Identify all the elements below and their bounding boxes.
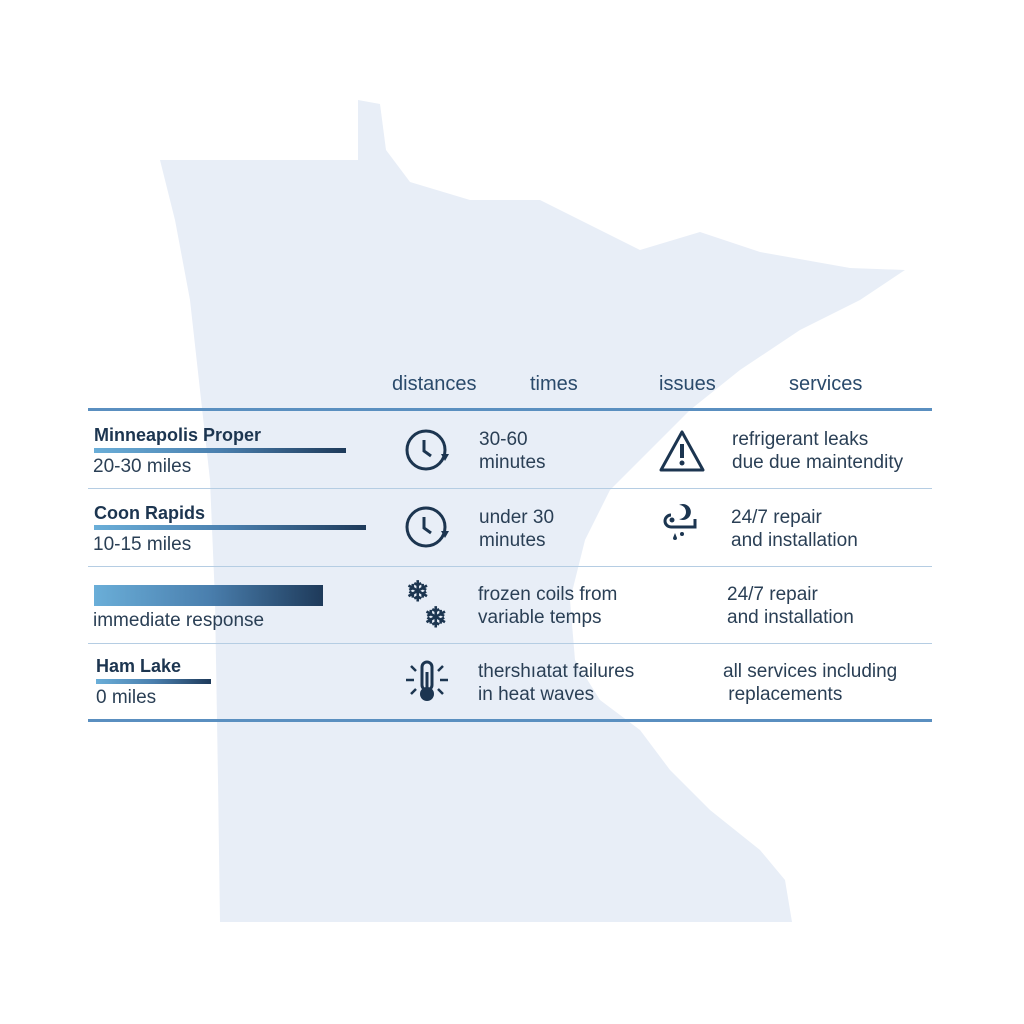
row 3: immediate response: variable temps (478, 607, 602, 628)
icon: snowflakes (406, 576, 447, 633)
row 4: Ham Lake: thershıatat failures (478, 661, 634, 682)
row 1: Minneapolis Proper: 20-30 miles (93, 456, 191, 477)
row 3: immediate response: 24/7 repair (727, 584, 818, 605)
row 1: Minneapolis Proper: refrigerant leaks (732, 429, 868, 450)
row 1: Minneapolis Proper: 30-60 (479, 429, 528, 450)
icon: clock (406, 506, 449, 548)
icon: snowflakes: ❄ (424, 602, 447, 633)
row 1: Minneapolis Proper: minutes (479, 452, 546, 473)
row 4: Ham Lake: all services including (723, 661, 897, 682)
row 2: Coon Rapids: 10-15 miles (93, 534, 191, 555)
row 3: immediate response: and installation (727, 607, 854, 628)
column headers: issues (659, 373, 716, 395)
row 2: Coon Rapids: minutes (479, 530, 546, 551)
icon: cloud rain (664, 504, 696, 540)
row 2: Coon Rapids: Coon Rapids (94, 503, 205, 523)
row 4: Ham Lake: 0 miles (96, 687, 156, 708)
icon: snowflakes: ❄ (406, 576, 429, 607)
column headers: services (789, 373, 862, 395)
icon: thermometer (406, 660, 448, 701)
icon: clock (406, 430, 449, 470)
column headers: times (530, 373, 578, 395)
row 3: immediate response: immediate response (93, 610, 264, 631)
row 1: Minneapolis Proper (93, 425, 903, 477)
column headers: distances (392, 373, 476, 395)
row 4: Ham Lake: in heat waves (478, 684, 594, 705)
row 1: Minneapolis Proper: Minneapolis Proper (94, 425, 261, 445)
row 1: Minneapolis Proper: due due maintendity (732, 452, 903, 473)
row 4: Ham Lake (96, 656, 897, 708)
row 2: Coon Rapids (93, 503, 858, 555)
row 2: Coon Rapids: and installation (731, 530, 858, 551)
row 3: immediate response (93, 576, 854, 633)
icon: warning (660, 430, 705, 472)
row 4: Ham Lake: Ham Lake (96, 656, 181, 676)
column headers (392, 373, 862, 395)
row 2: Coon Rapids: 24/7 repair (731, 507, 822, 528)
row 3: immediate response: frozen coils from (478, 584, 617, 605)
row 2: Coon Rapids: under 30 (479, 507, 554, 528)
row 4: Ham Lake: replacements (728, 684, 842, 705)
